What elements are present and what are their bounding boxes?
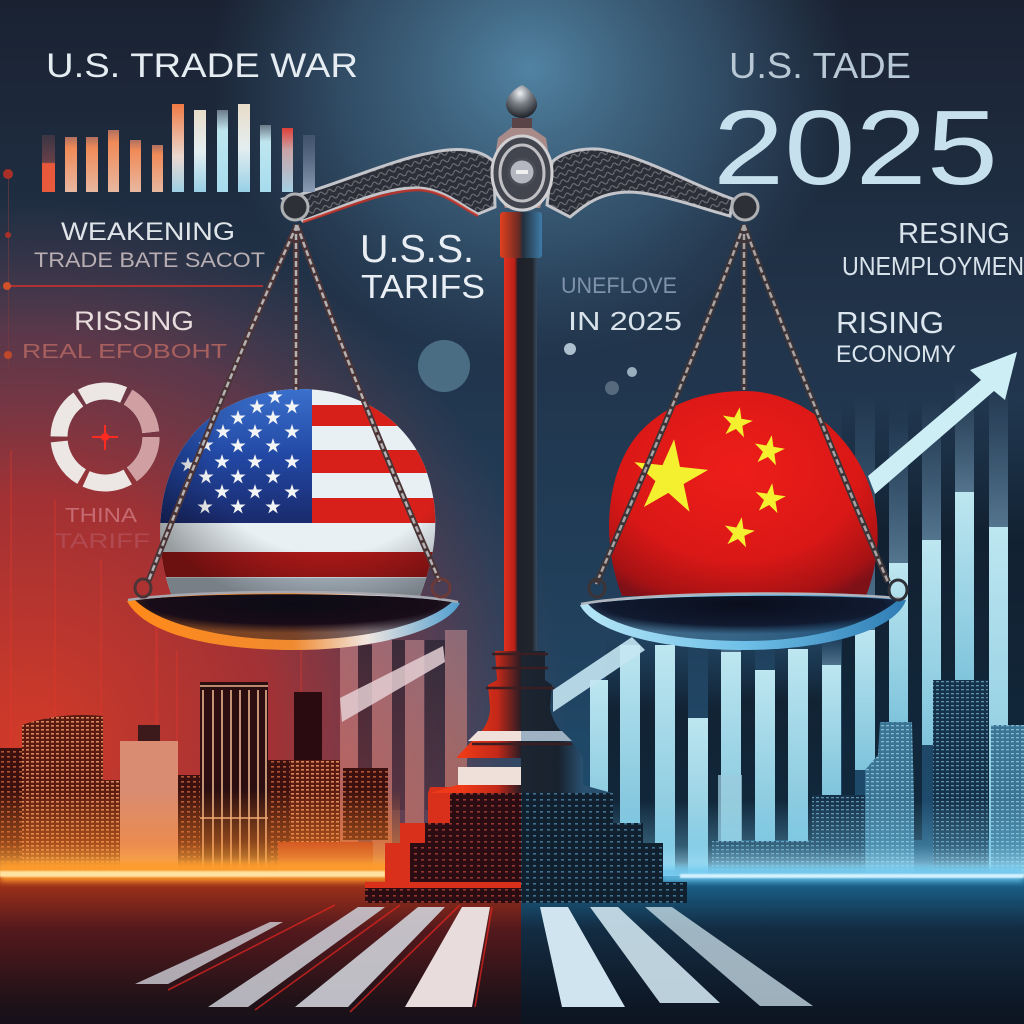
text: thina tariff: TARIFF (55, 530, 150, 553)
bell left (430, 651, 521, 793)
collar rings (472, 654, 572, 744)
label: U.S. tariffs (360, 228, 485, 305)
chains: left pan (135, 225, 450, 597)
left timeline rule with dots (3, 169, 263, 370)
label: U.S. tariffs: TARIFS (361, 268, 485, 305)
bar chart: top left (42, 104, 315, 192)
decorative lens glow (418, 340, 637, 395)
text: rising real effort: RISSING (74, 306, 194, 336)
stepped base right (521, 793, 687, 903)
text: rising unemployment (842, 218, 1024, 281)
heading: U.S. Tade: U.S. TADE (729, 45, 911, 86)
text: thina tariff: THINA (65, 505, 138, 527)
heading: 2025: 2025 (713, 89, 998, 207)
icon: donut gauge (42, 374, 168, 500)
stepped base left (365, 793, 521, 903)
floor: red and blue halves with perspective stripes (0, 878, 1024, 1024)
heading: U.S. Trade War: U.S. TRADE WAR (46, 47, 358, 85)
text: weakening trade: WEAKENING (61, 218, 235, 246)
horizon glow (0, 862, 1024, 882)
flag ball: China (609, 391, 878, 596)
text: rising economy: RISING (836, 305, 944, 340)
text: rising real effort: REAL EFOBOHT (22, 341, 227, 363)
skyline: left city (0, 682, 400, 876)
arrow: rising trend centre (553, 637, 645, 712)
text: rising economy: ECONOMY (836, 341, 956, 368)
pole (504, 250, 537, 655)
text: unemployment in 2025 (561, 273, 682, 336)
scale pan: right (580, 593, 906, 650)
arrow: rising trend right (868, 352, 1017, 494)
flag ball: United States (160, 389, 438, 597)
skyline: right city (600, 680, 1024, 876)
chains: right pan (589, 225, 907, 600)
text: unemployment in 2025: IN 2025 (568, 306, 682, 336)
white bands (458, 731, 521, 785)
text: rising unemployment: RESING (898, 218, 1010, 250)
background stripes: red side (10, 450, 467, 875)
text: rising economy (836, 305, 956, 368)
scale: beam with ornaments (282, 85, 758, 222)
bell right (521, 651, 612, 793)
text: weakening trade (34, 218, 265, 272)
text: unemployment in 2025: UNEFLOVE (561, 273, 677, 298)
scale: pedestal and column (365, 212, 687, 903)
finial (506, 85, 537, 118)
base red edges (365, 787, 521, 888)
label: U.S. tariffs: U.S.S. (360, 228, 474, 271)
white bands right (521, 731, 572, 741)
text: rising real effort (22, 306, 227, 363)
upper collar (500, 212, 542, 258)
background bars: blue side (590, 380, 1024, 875)
scale pan: left (127, 591, 460, 650)
arrow: rising trend left (340, 646, 445, 722)
text: weakening trade: TRADE BATE SACOT (34, 249, 265, 272)
text: thina tariff (55, 505, 150, 553)
